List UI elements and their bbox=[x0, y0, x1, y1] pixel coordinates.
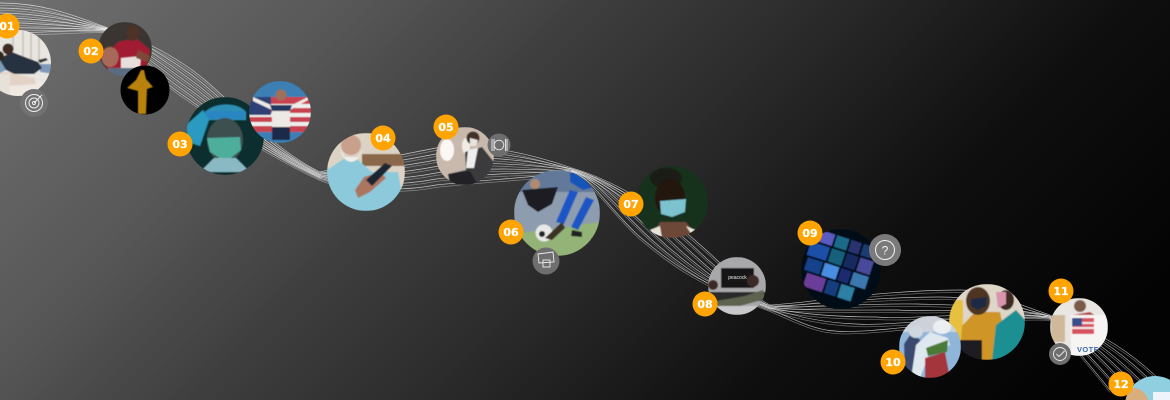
item 01: couple on sofa bbox=[0, 30, 51, 96]
item 08: couple watching TV bbox=[708, 257, 766, 315]
badge 03 bbox=[168, 132, 192, 156]
item 09: wall of news screens bbox=[797, 228, 881, 309]
badge 10: 10 bbox=[885, 356, 901, 369]
item 06: soccer player bbox=[514, 170, 600, 256]
icon: basketball hoop bbox=[532, 248, 560, 274]
item 07: woman wearing mask bbox=[636, 166, 708, 238]
badge 06 bbox=[498, 220, 524, 244]
item: athlete with American flag bbox=[249, 81, 311, 143]
badge 02: 02 bbox=[83, 45, 99, 58]
badge 05 bbox=[434, 114, 458, 140]
item 11: voting booth: VOTE bbox=[1077, 345, 1099, 354]
item 10: cyclists bbox=[899, 316, 961, 378]
badge 11 bbox=[1048, 278, 1074, 304]
badge 05: 05 bbox=[438, 121, 454, 134]
badge 02 bbox=[78, 38, 104, 64]
icon: question mark: ? bbox=[882, 244, 889, 258]
item 02: football fan bbox=[98, 22, 152, 76]
icon: target bbox=[20, 89, 48, 117]
badge 12 bbox=[1108, 372, 1134, 396]
badge 12: 12 bbox=[1113, 378, 1129, 391]
badge 04: 04 bbox=[375, 132, 391, 145]
item 11: voting booth bbox=[1050, 298, 1108, 356]
badge 09 bbox=[798, 220, 822, 246]
badge 04 bbox=[370, 126, 396, 150]
badge 08 bbox=[692, 292, 718, 316]
badge 11: 11 bbox=[1053, 285, 1069, 298]
icon: check mark bbox=[1049, 343, 1071, 365]
badge 06: 06 bbox=[503, 226, 519, 239]
item 12: child at vaccination bbox=[1126, 376, 1170, 400]
badge 09: 09 bbox=[802, 227, 818, 240]
icon: question mark bbox=[869, 234, 901, 266]
badge 07: 07 bbox=[623, 198, 639, 211]
item 08: couple watching TV: peacock bbox=[728, 275, 747, 281]
item 05: traveler on plane bbox=[436, 127, 494, 185]
item 03: health worker with shield bbox=[186, 97, 264, 175]
badge 01 bbox=[0, 14, 20, 38]
icon: plate and cutlery bbox=[488, 134, 510, 156]
item: friends in masks bbox=[949, 284, 1025, 360]
badge 08: 08 bbox=[697, 298, 713, 311]
item: golden statuette bbox=[120, 65, 170, 115]
badge 07 bbox=[618, 192, 644, 216]
item 04: man with remote bbox=[327, 133, 405, 211]
badge 10 bbox=[880, 350, 906, 374]
badge 03: 03 bbox=[172, 138, 188, 151]
